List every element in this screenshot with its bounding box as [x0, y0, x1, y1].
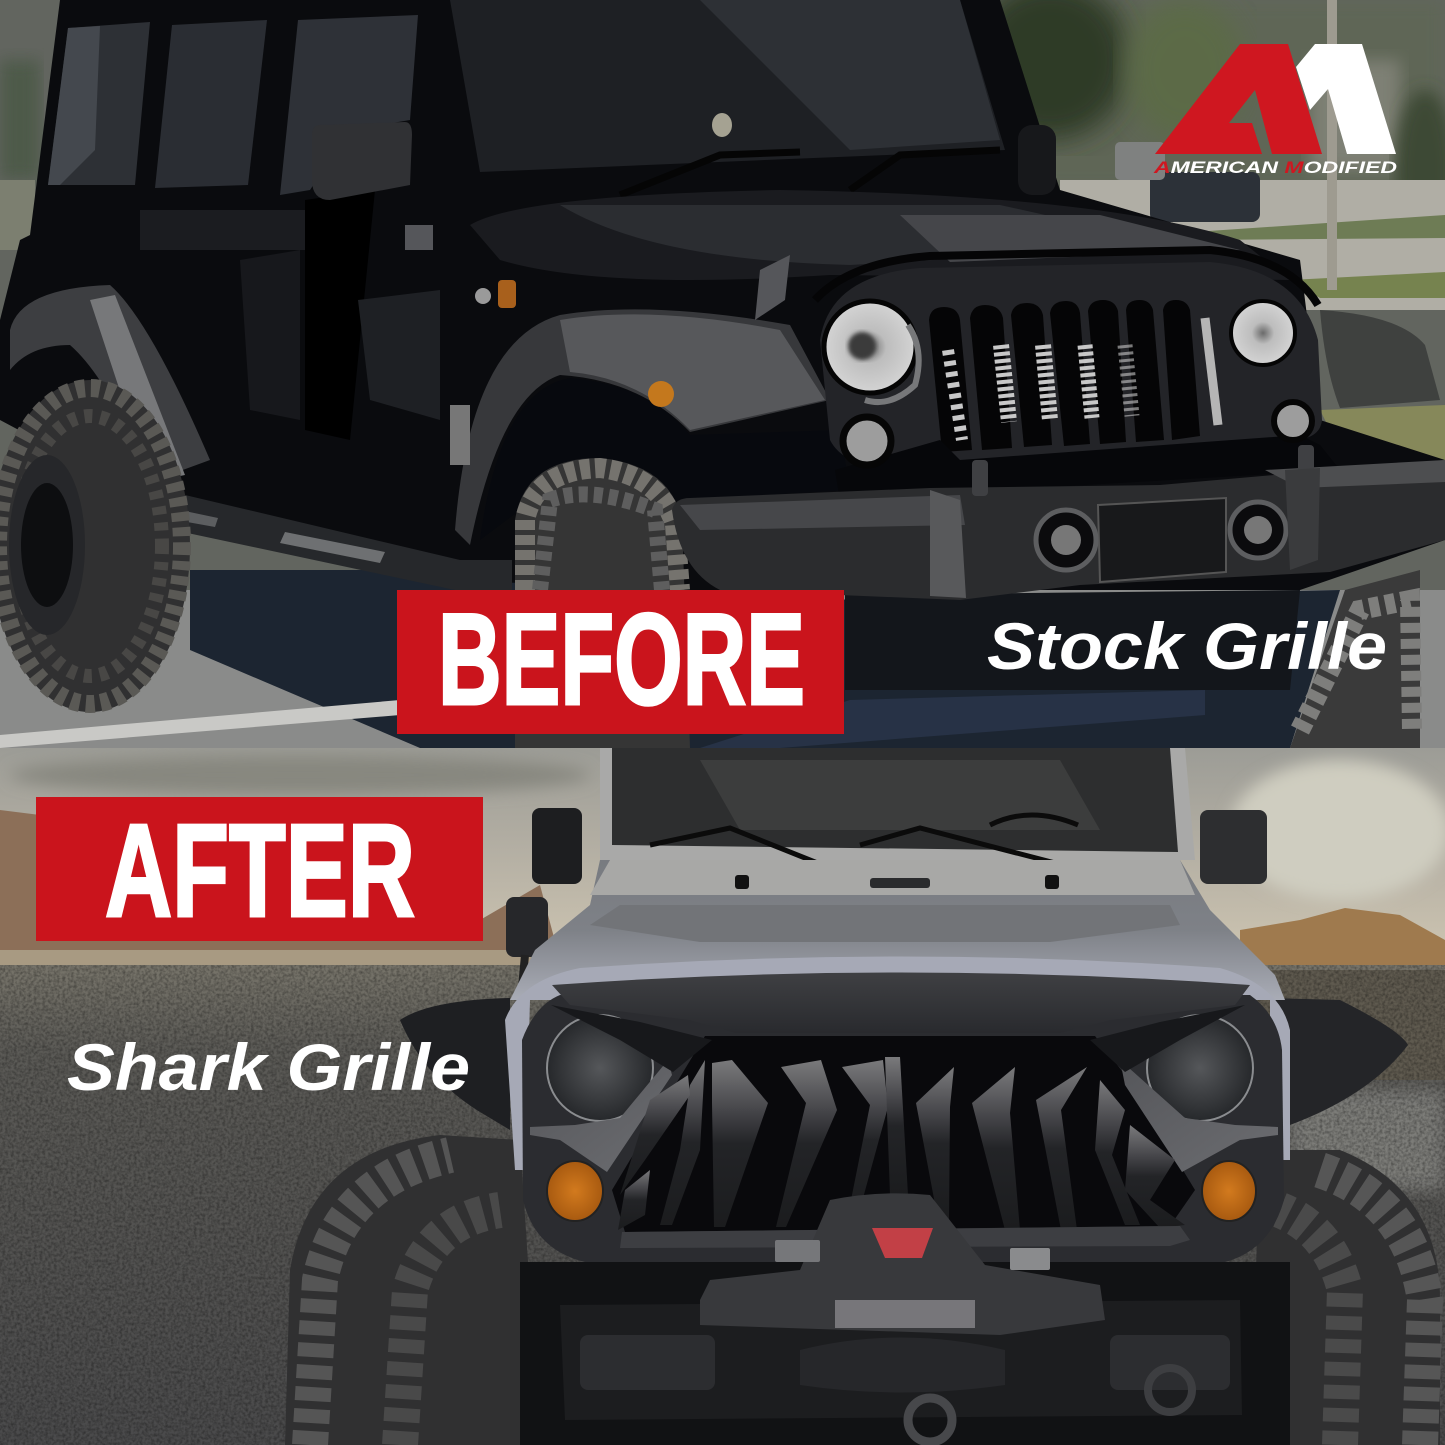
grille slots — [929, 300, 1200, 452]
turn signals — [547, 1161, 1256, 1221]
fog lamps — [843, 402, 1312, 465]
lower valance — [874, 436, 1283, 472]
tires — [285, 1135, 1440, 1445]
front bumper — [672, 445, 1445, 600]
logo wordmark: A MERICAN M ODIFIED — [1153, 158, 1397, 177]
mirror — [312, 122, 412, 200]
grille silver tub — [505, 956, 1290, 1170]
door pillar shadow — [305, 190, 375, 440]
mirrors — [506, 808, 1267, 984]
teeth — [618, 1057, 1185, 1230]
shark grille — [505, 956, 1290, 1262]
label: stock grille: Stock Grille — [987, 609, 1387, 683]
background: ground — [0, 965, 1445, 1445]
right headlamp — [1147, 1015, 1253, 1121]
rear tire — [0, 380, 190, 712]
badge: before — [397, 586, 844, 734]
left headlamp — [547, 1015, 653, 1121]
stock grille — [816, 246, 1322, 468]
background: mountains — [0, 810, 1445, 975]
wheel wells — [480, 378, 850, 540]
right brow — [1090, 1005, 1245, 1072]
side step — [185, 495, 512, 590]
socket left — [530, 1060, 672, 1172]
left headlamp — [824, 301, 919, 402]
body panels highlights — [140, 210, 305, 250]
logo: American Modified — [1153, 44, 1397, 177]
grille radiator bars — [948, 318, 1218, 440]
logo red A — [1155, 44, 1322, 154]
front fender — [455, 309, 830, 545]
label: shark grille: Shark Grille — [67, 1030, 470, 1104]
badge: after: AFTER — [105, 797, 415, 944]
jeep body — [0, 0, 1445, 590]
front tire — [515, 458, 1420, 748]
panel: before photo — [0, 0, 1445, 750]
hood — [510, 860, 1285, 1000]
background: sky — [0, 748, 1445, 940]
windshield — [450, 0, 1005, 172]
rear fender — [10, 285, 210, 482]
right headlamp — [1231, 301, 1295, 365]
panel: after photo — [0, 748, 1445, 1445]
grille body — [522, 995, 1284, 1262]
grille lower lip — [620, 1226, 1190, 1248]
socket right — [1120, 1060, 1278, 1172]
hood — [470, 190, 1290, 280]
flares — [400, 998, 1408, 1130]
background scenery — [0, 0, 1445, 750]
winch and bumper — [520, 1193, 1290, 1445]
right fender — [1320, 310, 1440, 408]
side details — [475, 288, 491, 304]
badge: before: BEFORE — [438, 586, 805, 732]
background: clouds — [10, 755, 1445, 900]
mouth — [612, 1036, 1195, 1232]
logo white M stroke — [1296, 44, 1396, 154]
left brow — [551, 1005, 712, 1072]
side windows — [48, 22, 150, 185]
windshield and cab — [600, 748, 1195, 872]
grille top brow — [552, 972, 1250, 1006]
